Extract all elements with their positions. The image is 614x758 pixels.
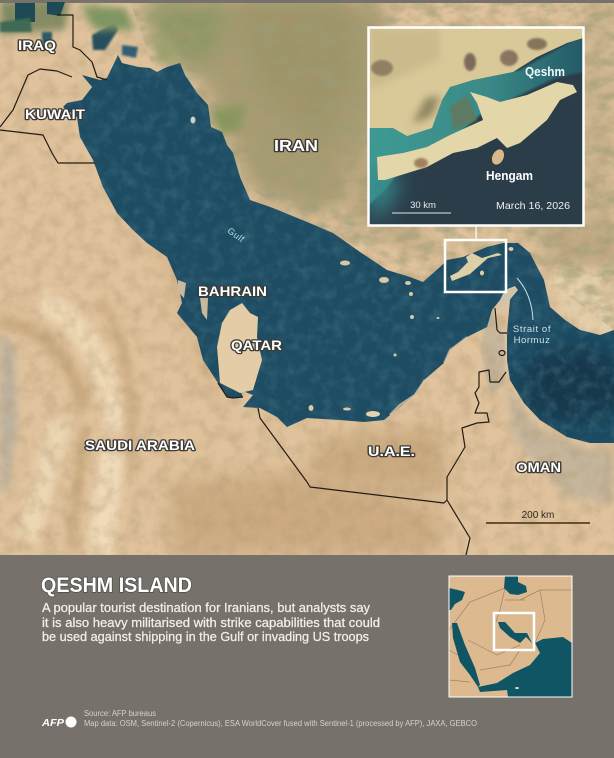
label: Bahrain: BAHRAIN (198, 283, 267, 299)
vegetation and marshes (0, 2, 245, 135)
label: Strait of Hormuz: Hormuz (514, 335, 550, 346)
source and credits: Map data: OSM, Sentinel-2 (Copernicus), ESA WorldCover fused with Sentinel-1 (processed by AFP), JAXA, GEBCO (84, 719, 477, 728)
Qeshm island (377, 82, 577, 180)
label: Kuwait: KUWAIT (25, 106, 85, 122)
description: it is also heavy militarised with strike capabilities that could (42, 615, 380, 630)
inset: satellite view of Qeshm (368, 28, 584, 226)
sea: the Gulf and Gulf of Oman (63, 55, 614, 443)
mangrove patch (450, 95, 477, 130)
land base (0, 0, 614, 555)
Mediterranean (449, 588, 465, 610)
label: U.A.E.: U.A.E. (368, 443, 415, 459)
Arabian Sea (478, 637, 572, 697)
label: Hengam: Hengam (486, 169, 533, 183)
mini map borders (449, 588, 572, 682)
description: A popular tourist destination for Iranians, but analysts say (42, 600, 370, 615)
mini Gulf (498, 622, 532, 643)
label: Iran: IRAN (274, 138, 318, 155)
scale bar: 200 km (486, 510, 590, 524)
mini map locator box (494, 613, 534, 650)
Red Sea (452, 623, 480, 687)
Hengam island (492, 149, 504, 165)
logo: AFP (41, 716, 76, 729)
description: be used against shipping in the Gulf or invading US troops (42, 629, 369, 644)
label: Iraq: IRAQ (18, 37, 56, 53)
label: Qeshm: Qeshm (525, 65, 565, 79)
locator mini map (449, 576, 572, 697)
date: March 16, 2026 (496, 200, 570, 212)
label: Gulf: Gulf (226, 226, 246, 244)
footer panel (41, 576, 572, 728)
mainland Iran (369, 28, 583, 136)
inset scale bar: 30 km (392, 202, 451, 214)
logo: AFP: AFP (41, 717, 65, 729)
label: Qatar: QATAR (231, 337, 282, 353)
country borders (0, 15, 507, 555)
islands and peninsulas (78, 78, 518, 417)
label: Oman: OMAN (516, 459, 561, 475)
arc: Strait of Hormuz (517, 278, 533, 320)
title: QESHM ISLAND (41, 574, 192, 597)
connector between inset and locator box (476, 226, 477, 240)
label: Saudi Arabia: SAUDI ARABIA (85, 437, 195, 453)
label: Strait of Hormuz: Strait of (513, 324, 551, 335)
locator box on Qeshm (445, 240, 506, 292)
scale bar: 200 km: 200 km (522, 510, 554, 521)
map panel (0, 0, 614, 555)
source and credits: Source: AFP bureaus (84, 709, 156, 718)
Caspian Sea (504, 576, 527, 595)
inset scale bar: 30 km: 30 km (410, 200, 436, 211)
sediment plume water (369, 35, 583, 218)
